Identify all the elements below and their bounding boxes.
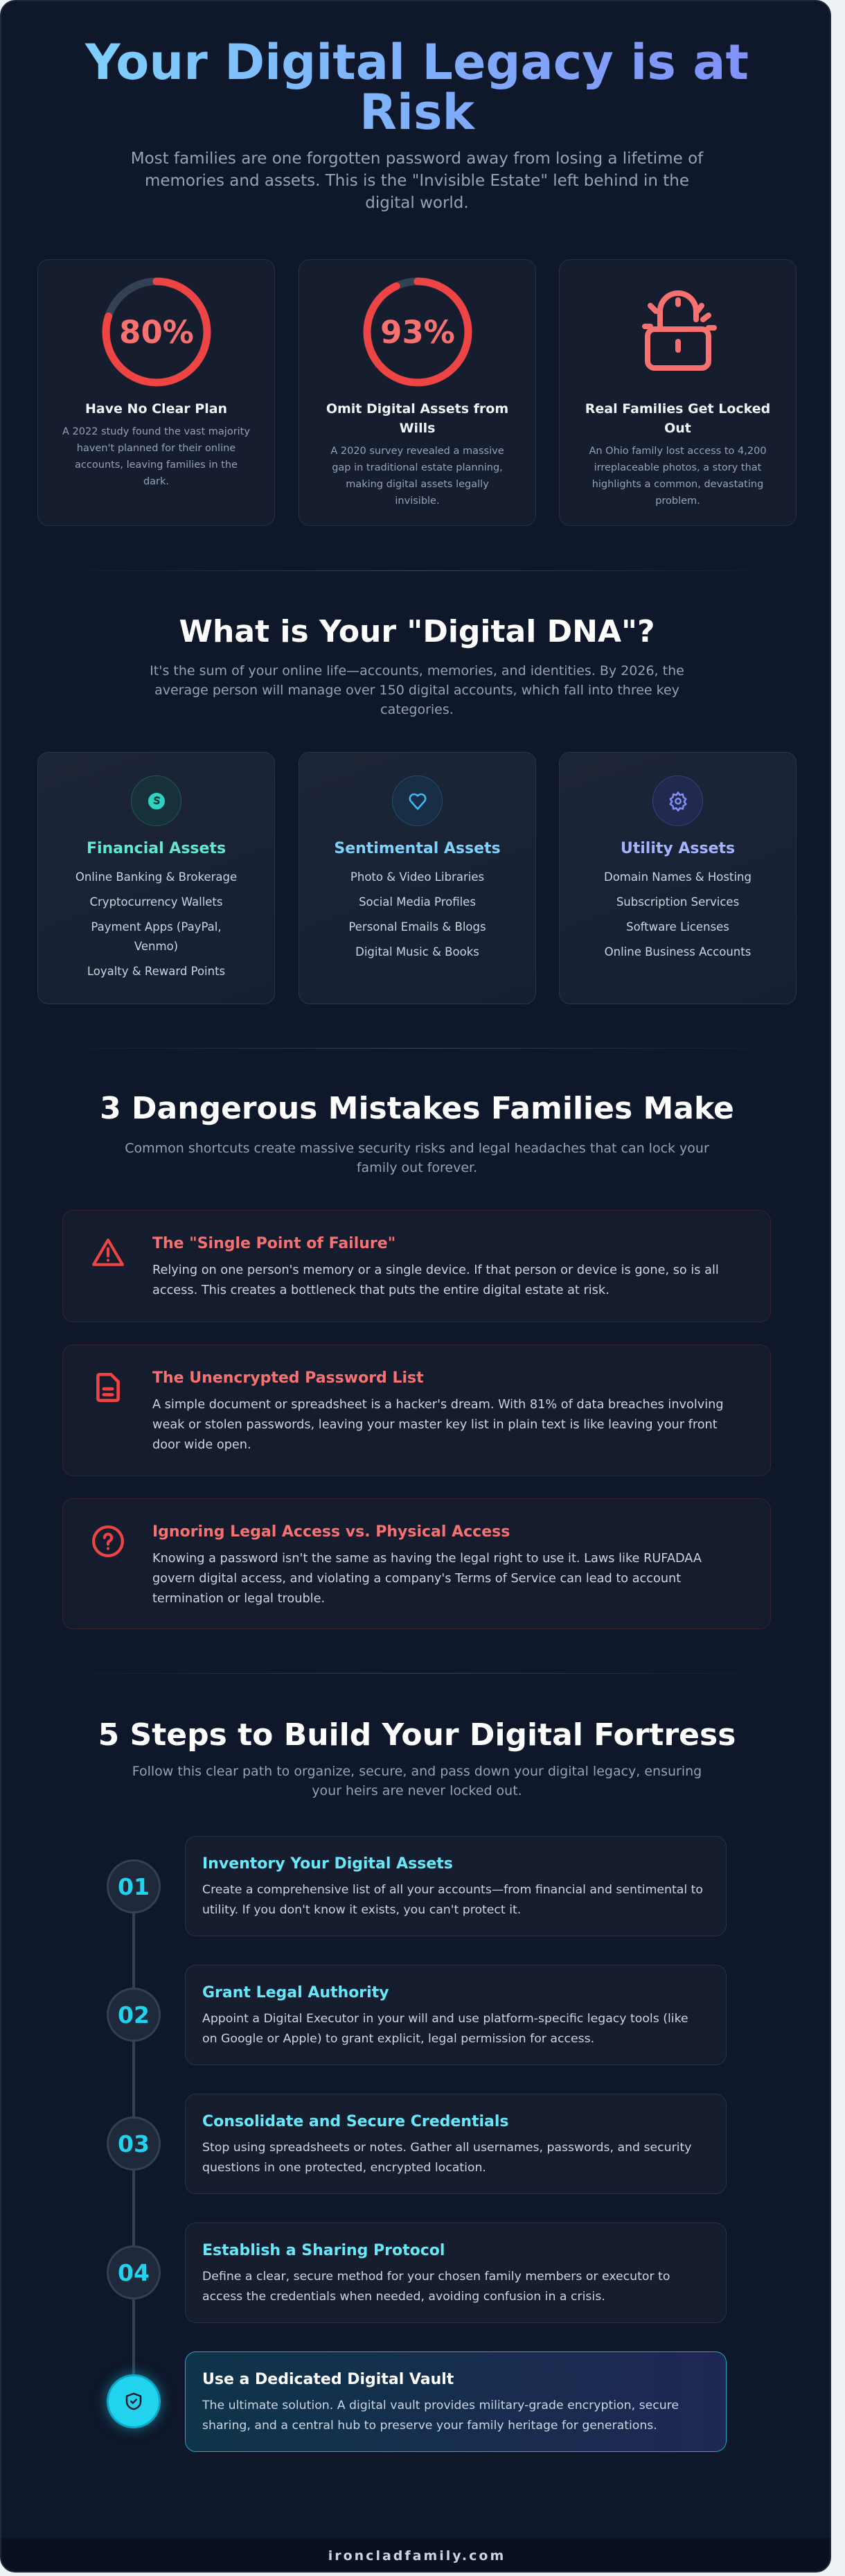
panel: mistake 1: The "Single Point of Failure" [152,1235,395,1252]
panel: financial assets: Financial Assets [87,840,226,857]
footer: ironcladfamily.com [328,2548,506,2564]
icon: question [92,1525,124,1557]
panel: mistake 3: Ignoring Legal Access vs. Physical Access [152,1523,510,1541]
panel: mistake 1: Relying on one person's memory or a single device. If that person or device is gone, so is all access. This creates a bottleneck that puts the entire digital estate at risk. [152,1263,719,1297]
ring chart 93%: 93% [380,314,454,351]
title: Your Digital Legacy is at Risk [85,34,749,141]
stat card: 80%: Have No Clear Plan [85,401,227,417]
icon: heart [392,776,443,826]
panel: financial assets: Payment Apps (PayPal, Venmo) [91,920,222,953]
stat card: 93%: A 2020 survey revealed a massive gap in traditional estate planning, making digital assets legally invisible. [330,446,504,507]
step 5 shield icon [107,2374,161,2428]
step 3 [185,2094,727,2194]
step 3: Consolidate and Secure Credentials [202,2113,509,2130]
step 5: The ultimate solution. A digital vault provides military-grade encryption, secure sharing, and a central hub to preserve your family heritage for generations. [202,2399,679,2433]
stat card: 80% [37,259,275,526]
panel: financial assets: Loyalty & Reward Points [87,965,225,978]
ring chart 93% [363,277,472,387]
panel: utility assets: Software Licenses [626,920,729,934]
stat card: 80%: A 2022 study found the vast majority haven't planned for their online accounts, leaving families in the dark. [62,426,250,487]
panel: mistake 1 [62,1210,771,1322]
icon: broken lock [642,290,717,371]
step 5: Use a Dedicated Digital Vault [202,2371,454,2388]
step 2: Appoint a Digital Executor in your will and use platform-specific legacy tools (like on Google or Apple) to grant explicit, legal permission for access. [202,2012,688,2046]
step 1 number [107,1859,161,1913]
panel: sentimental assets: Personal Emails & Blogs [348,920,486,934]
icon: dollar [131,776,181,826]
panel: financial assets [37,752,275,1004]
stat card: locked out [559,259,797,526]
step 1 [185,1836,727,1936]
step 1 number: 01 [118,1873,150,1900]
icon: gear [652,776,703,826]
step 4 number: 04 [118,2259,150,2286]
panel: financial assets: Online Banking & Brokerage [75,870,237,884]
panel: mistake 2: The Unencrypted Password List [152,1369,424,1387]
step 2 [185,1965,727,2065]
step 4: Define a clear, secure method for your chosen family members or executor to access the credentials when needed, avoiding confusion in a crisis. [202,2270,670,2304]
step 1: Create a comprehensive list of all your accounts—from financial and sentimental to utility. If you don't know it exists, you can't protect it. [202,1883,703,1917]
panel: sentimental assets: Digital Music & Books [355,945,479,958]
stat card: 93% [299,259,536,526]
panel: sentimental assets: Photo & Video Libraries [350,870,484,884]
text: mistakes intro: Common shortcuts create massive security risks and legal headaches that can lock your family out forever. [125,1141,709,1175]
panel: utility assets [559,752,797,1004]
intro text: Most families are one forgotten password away from losing a lifetime of memories and assets. This is the "Invisible Estate" left behind in the digital world. [131,150,703,212]
panel: sentimental assets: Social Media Profiles [359,895,476,909]
stat card: 93%: Omit Digital Assets from Wills [326,401,508,436]
panel: mistake 3 [62,1498,771,1629]
panel: utility assets: Domain Names & Hosting [604,870,751,884]
step 4 number [107,2245,161,2299]
step 2 number [107,1988,161,2042]
panel: mistake 2 [62,1344,771,1476]
step 5 [185,2351,727,2452]
step 3 number: 03 [118,2130,150,2157]
ring chart 80% [103,277,211,387]
step 4 [185,2223,727,2323]
text: digital DNA intro: It's the sum of your online life—accounts, memories, and identities. By 2026, the average person will manage over 150 digital accounts, which fall into three key categories. [150,663,684,717]
text: steps intro: Follow this clear path to organize, secure, and pass down your digital legacy, ensuring your heirs are never locked out. [132,1764,702,1798]
panel: sentimental assets: Sentimental Assets [334,840,501,857]
icon: warning [92,1238,124,1266]
heading: mistakes: 3 Dangerous Mistakes Families Make [100,1091,734,1126]
panel: utility assets: Online Business Accounts [605,945,751,958]
step 4: Establish a Sharing Protocol [202,2242,445,2259]
heading: digital DNA: What is Your "Digital DNA"? [179,614,655,649]
stat card: locked out: Real Families Get Locked Out [585,401,770,436]
step 1: Inventory Your Digital Assets [202,1855,453,1873]
step 3: Stop using spreadsheets or notes. Gather all usernames, passwords, and security questions in one protected, encrypted location. [202,2141,691,2175]
stat card: locked out: An Ohio family lost access to 4,200 irreplaceable photos, a story that highlights a common, devastating problem. [589,446,767,507]
panel: financial assets: Cryptocurrency Wallets [90,895,223,909]
heading: steps: 5 Steps to Build Your Digital Fortress [98,1717,736,1753]
panel: utility assets: Subscription Services [616,895,739,909]
panel: mistake 2: A simple document or spreadsheet is a hacker's dream. With 81% of data breaches involving weak or stolen passwords, leaving your master key list in plain text is like leaving your front door wide open. [152,1398,724,1452]
step 2 number: 02 [118,2001,150,2028]
panel: sentimental assets [299,752,536,1004]
footer [1,2538,833,2574]
step 2: Grant Legal Authority [202,1984,389,2001]
panel: mistake 3: Knowing a password isn't the same as having the legal right to use it. Laws like RUFADAA govern digital access, and violating a company's Terms of Service can lead to account termination or legal trouble. [152,1552,702,1606]
step 3 number [107,2117,161,2171]
icon: document [96,1373,120,1402]
ring chart 80%: 80% [119,314,193,351]
timeline line [132,1886,135,2401]
panel: utility assets: Utility Assets [621,840,735,857]
